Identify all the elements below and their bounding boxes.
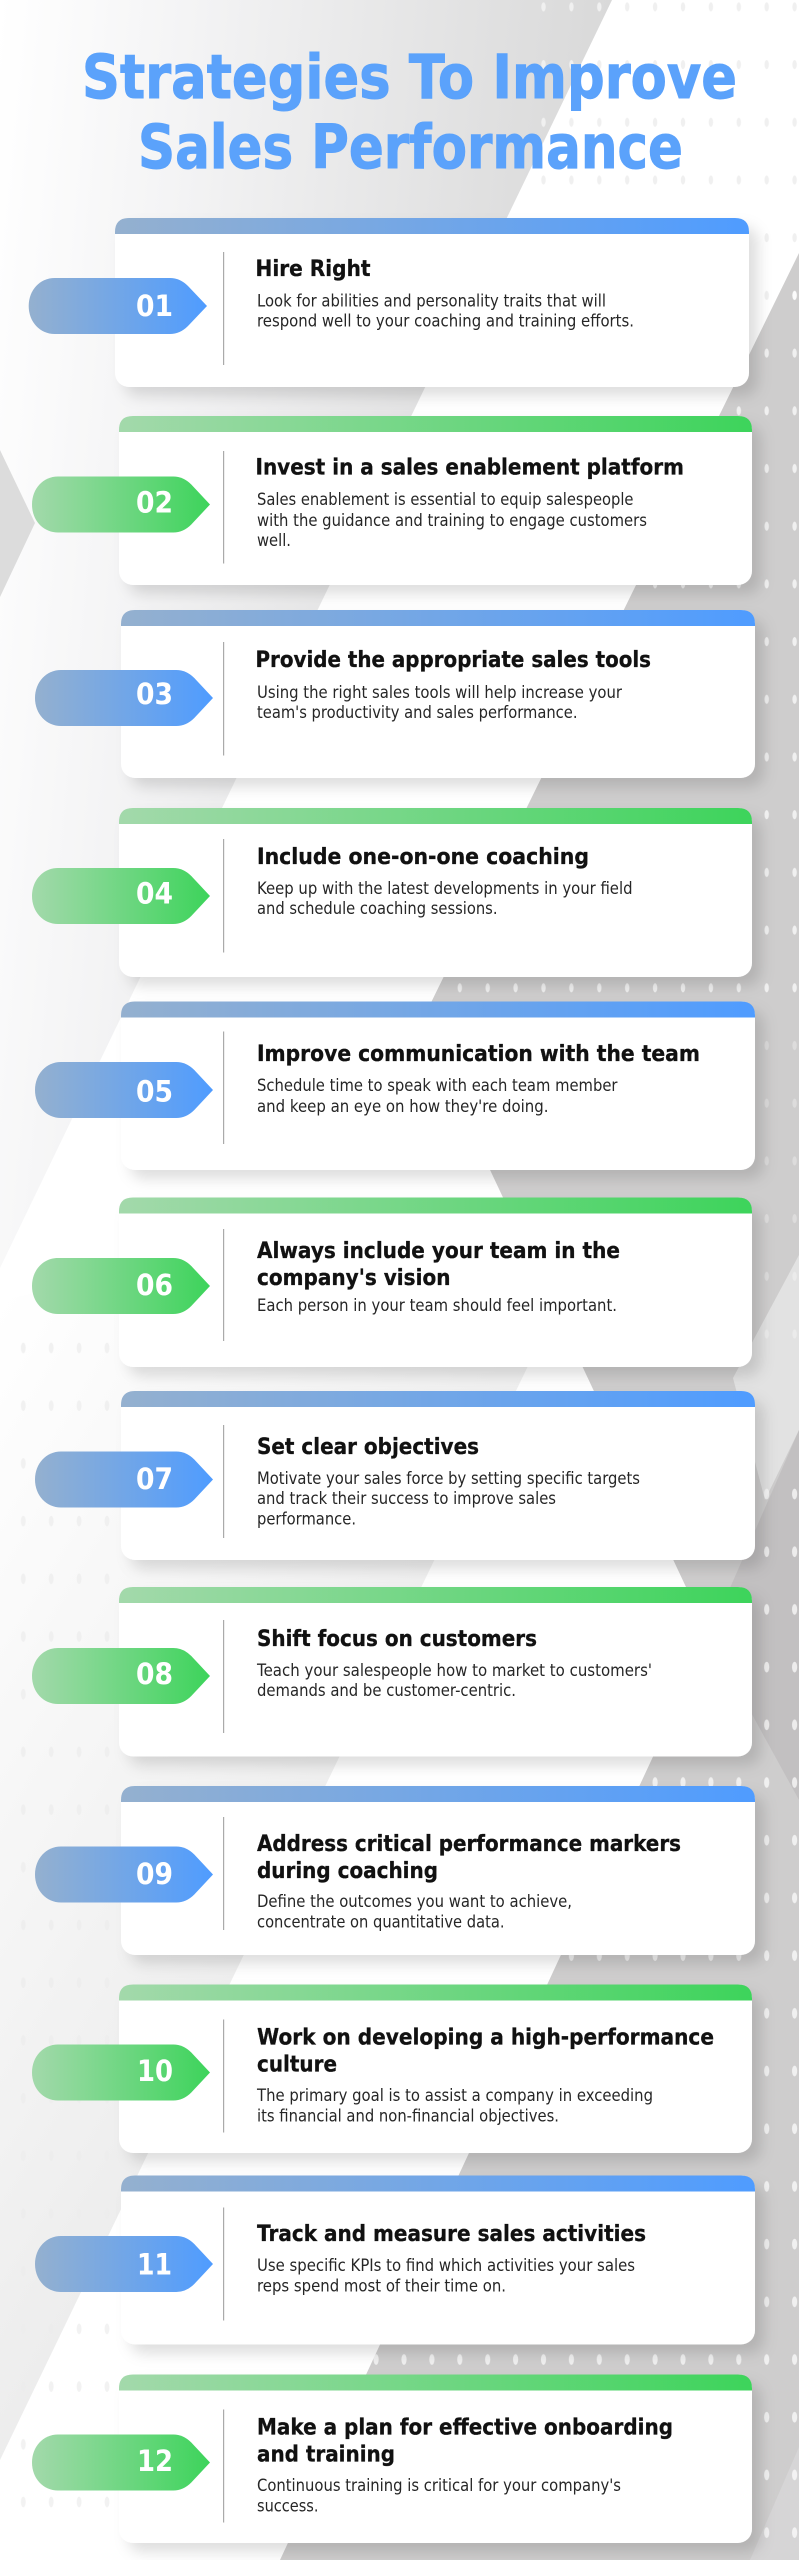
heading: company's vision (257, 1266, 450, 1291)
step number: 08 (136, 1657, 173, 1691)
number arrow badge (32, 2434, 210, 2490)
divider (223, 839, 224, 952)
number arrow badge (35, 1452, 213, 1508)
step number: 07 (136, 1462, 173, 1496)
heading: Make a plan for effective onboarding (257, 2416, 673, 2440)
description: Sales enablement is essential to equip salespeople (257, 490, 634, 509)
step number: 02 (136, 486, 173, 520)
card body (119, 1587, 752, 1756)
description: Look for abilities and personality traits that will (257, 292, 606, 310)
number arrow badge (35, 2236, 213, 2292)
card body (121, 1786, 755, 1955)
heading: Track and measure sales activities (257, 2222, 646, 2247)
card body (119, 1984, 752, 2153)
divider (223, 252, 224, 365)
description: demands and be customer-centric. (257, 1681, 516, 1700)
panel: step 04 (32, 808, 752, 977)
description (257, 683, 622, 722)
step number: 01 (136, 289, 173, 323)
card top bar (119, 808, 752, 824)
description (256, 1661, 652, 1700)
number arrow badge (32, 1648, 210, 1704)
description: Keep up with the latest developments in your field (257, 879, 632, 898)
description (256, 2086, 653, 2126)
number arrow badge (35, 1846, 213, 1902)
title: Sales Performance (138, 112, 683, 183)
divider (223, 1229, 224, 1341)
divider (223, 2410, 224, 2522)
card top bar (121, 610, 755, 626)
heading: Set clear objectives (257, 1435, 479, 1460)
card body (119, 416, 752, 585)
card top bar (119, 416, 752, 432)
description: and schedule coaching sessions. (257, 899, 498, 918)
divider (223, 1817, 224, 1930)
number arrow badge (35, 670, 213, 726)
card body (121, 2176, 755, 2344)
description (257, 1892, 572, 1932)
step number: 11 (137, 2248, 172, 2282)
description: reps spend most of their time on. (257, 2276, 506, 2296)
description: Motivate your sales force by setting specific targets (257, 1469, 640, 1488)
step number: 03 (136, 677, 173, 711)
panel: step 03 (35, 610, 755, 778)
divider (223, 642, 224, 756)
description (257, 1469, 640, 1528)
description: Continuous training is critical for your company's (257, 2476, 621, 2495)
card top bar (121, 1786, 755, 1802)
description: and keep an eye on how they're doing. (257, 1097, 548, 1116)
card top bar (121, 2176, 755, 2192)
card body (121, 1391, 755, 1560)
description: and track their success to improve sales (257, 1489, 556, 1508)
description: respond well to your coaching and training efforts. (257, 312, 634, 330)
heading: Address critical performance markers (257, 1832, 681, 1857)
description (257, 1076, 618, 1116)
card top bar (119, 2374, 752, 2390)
step number: 04 (136, 876, 173, 910)
panel: step 02 (32, 416, 752, 585)
description: team's productivity and sales performance. (257, 703, 578, 722)
step number: 06 (136, 1268, 173, 1302)
description: Teach your salespeople how to market to customers' (256, 1661, 652, 1680)
heading: Hire Right (256, 257, 371, 282)
card body (121, 610, 755, 778)
card body (121, 1002, 755, 1170)
number arrow badge (32, 1258, 210, 1314)
step number: 12 (137, 2444, 173, 2478)
heading: Include one-on-one coaching (257, 845, 589, 870)
description: with the guidance and training to engage customers (257, 511, 647, 530)
divider (223, 2020, 224, 2132)
divider (223, 451, 224, 564)
panel: step 11 (35, 2176, 755, 2344)
panel: step 06 (32, 1198, 752, 1367)
heading: and training (257, 2442, 395, 2468)
card top bar (121, 1002, 755, 1018)
description: success. (257, 2496, 318, 2516)
heading (257, 1832, 681, 1884)
card body (119, 1198, 752, 1367)
description: performance. (257, 1510, 356, 1528)
heading: Improve communication with the team (257, 1042, 700, 1067)
heading: during coaching (257, 1859, 438, 1884)
divider (223, 1032, 224, 1144)
description: concentrate on quantitative data. (257, 1912, 504, 1932)
panel: step 07 (35, 1391, 755, 1560)
heading (257, 1239, 620, 1291)
panel: step 05 (35, 1002, 755, 1170)
number arrow badge (32, 476, 210, 532)
description: well. (257, 531, 291, 550)
card body (115, 218, 749, 387)
description: its financial and non-financial objectives. (257, 2106, 559, 2126)
description: Schedule time to speak with each team member (257, 1076, 618, 1095)
number arrow badge (32, 868, 210, 924)
heading: Always include your team in the (257, 1239, 620, 1264)
card body (119, 808, 752, 977)
card body (119, 2374, 752, 2543)
heading: Shift focus on customers (257, 1627, 537, 1652)
description: Use specific KPIs to find which activities your sales (257, 2256, 635, 2275)
number arrow badge (35, 1062, 213, 1118)
card top bar (115, 218, 749, 234)
divider (223, 1620, 224, 1733)
title (82, 42, 737, 183)
panel: step 01 (29, 218, 749, 387)
description (257, 879, 632, 918)
number arrow badge (32, 2044, 210, 2100)
description (257, 2476, 621, 2516)
heading: Invest in a sales enablement platform (256, 456, 684, 480)
description: Define the outcomes you want to achieve, (257, 1892, 572, 1911)
card top bar (121, 1391, 755, 1407)
description: The primary goal is to assist a company in exceeding (256, 2086, 653, 2105)
step number: 10 (137, 2054, 173, 2088)
card top bar (119, 1587, 752, 1603)
description (257, 292, 634, 330)
panel: step 09 (35, 1786, 755, 1955)
heading (257, 2416, 673, 2468)
card top bar (119, 1198, 752, 1214)
step number: 09 (136, 1857, 173, 1891)
description (257, 2256, 635, 2296)
heading (257, 2026, 714, 2078)
description (257, 490, 647, 550)
heading: culture (257, 2052, 337, 2078)
description: Each person in your team should feel important. (257, 1296, 617, 1315)
card top bar (119, 1984, 752, 2000)
description: Using the right sales tools will help increase your (257, 683, 622, 702)
heading: Provide the appropriate sales tools (256, 648, 651, 673)
heading: Work on developing a high-performance (257, 2026, 714, 2050)
number arrow badge (29, 278, 207, 334)
divider (223, 2208, 224, 2320)
step number: 05 (136, 1074, 173, 1108)
divider (223, 1425, 224, 1538)
panel: step 12 (32, 2374, 752, 2543)
panel: step 10 (32, 1984, 752, 2153)
panel: step 08 (32, 1587, 752, 1756)
